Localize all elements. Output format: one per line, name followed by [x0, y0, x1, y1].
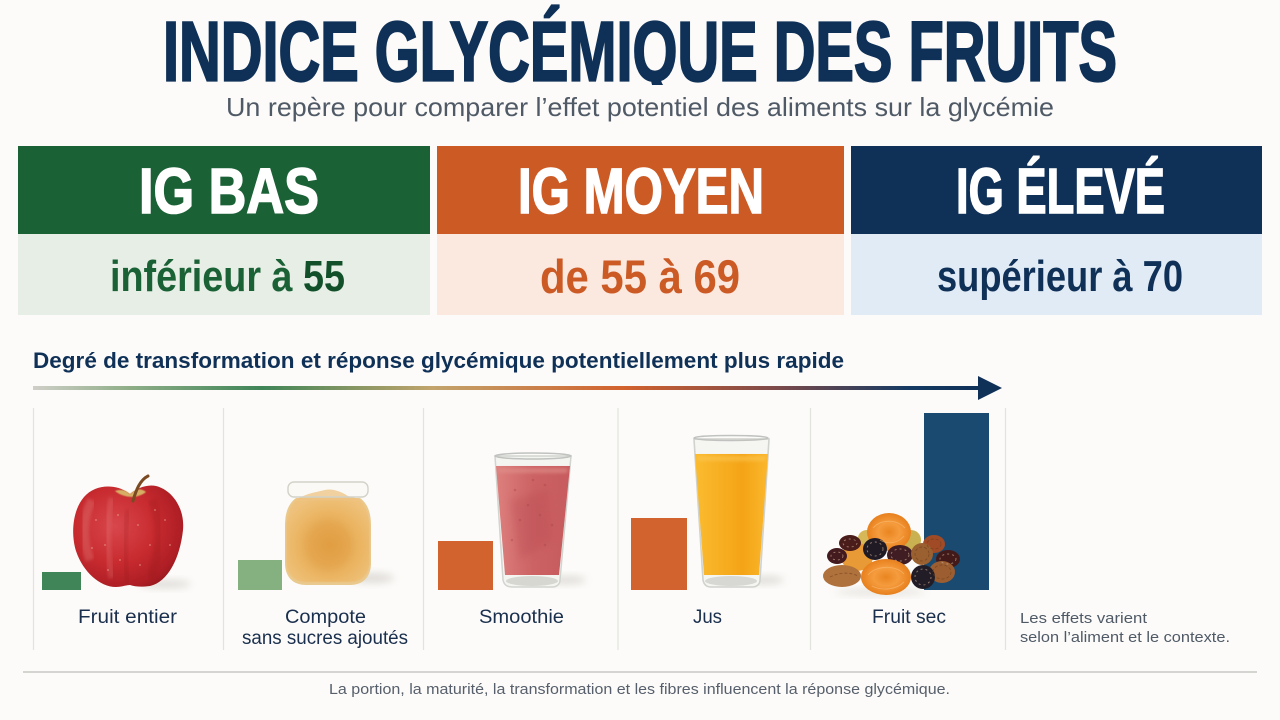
panel: IG élevé [851, 146, 1262, 315]
header label: IG élevé: IG ÉLEVÉ [956, 155, 1165, 227]
icon: compote jar [285, 482, 394, 585]
bar: fruit entier [42, 572, 81, 590]
header label: IG bas: IG BAS [139, 155, 319, 227]
icon: apple [73, 476, 191, 588]
label: compote: sans sucres ajoutés [242, 628, 408, 649]
side note: Les effets varient [1020, 610, 1148, 627]
header: IG élevé [851, 146, 1262, 234]
header: IG bas [18, 146, 430, 234]
label: jus: Jus [693, 607, 722, 628]
label: smoothie: Smoothie [479, 607, 564, 628]
label: fruit entier: Fruit entier [78, 607, 178, 628]
side note: selon l’aliment et le contexte. [1020, 629, 1230, 646]
column: fruit sec [823, 413, 989, 628]
column: smoothie [438, 453, 586, 628]
range text: inférieur à 55: inférieur à 55 [110, 252, 345, 301]
range background: IG élevé [851, 234, 1262, 315]
bar: smoothie [438, 541, 493, 590]
subtitle: Un repère pour comparer l’effet potentiel des aliments sur la glycémie [226, 92, 1054, 122]
footer note: La portion, la maturité, la transformation et les fibres influencent la réponse glycémique. [329, 682, 950, 698]
range text: de 55 à 69: de 55 à 69 [540, 250, 740, 303]
icon: juice glass [694, 436, 784, 587]
bar: compote [238, 560, 282, 590]
column: compote [238, 482, 408, 649]
icon: smoothie glass [495, 453, 586, 587]
range text: supérieur à 70: supérieur à 70 [937, 252, 1183, 301]
column: jus [631, 436, 784, 628]
header: IG moyen [437, 146, 844, 234]
axis heading: Degré de transformation et réponse glycémique potentiellement plus rapide [33, 348, 844, 373]
panel: IG bas [18, 146, 430, 315]
range background: IG moyen [437, 234, 844, 315]
header label: IG moyen: IG MOYEN [518, 155, 764, 227]
label: fruit sec: Fruit sec [872, 607, 946, 628]
icon: dried fruit pile [823, 513, 960, 595]
column: fruit entier [42, 476, 191, 628]
panel: IG moyen [437, 146, 844, 315]
arrow: increasing transformation [33, 376, 1002, 400]
label: compote: Compote [285, 607, 366, 628]
range background: IG bas [18, 234, 430, 315]
bar: jus [631, 518, 687, 590]
bar: fruit sec [924, 413, 989, 590]
